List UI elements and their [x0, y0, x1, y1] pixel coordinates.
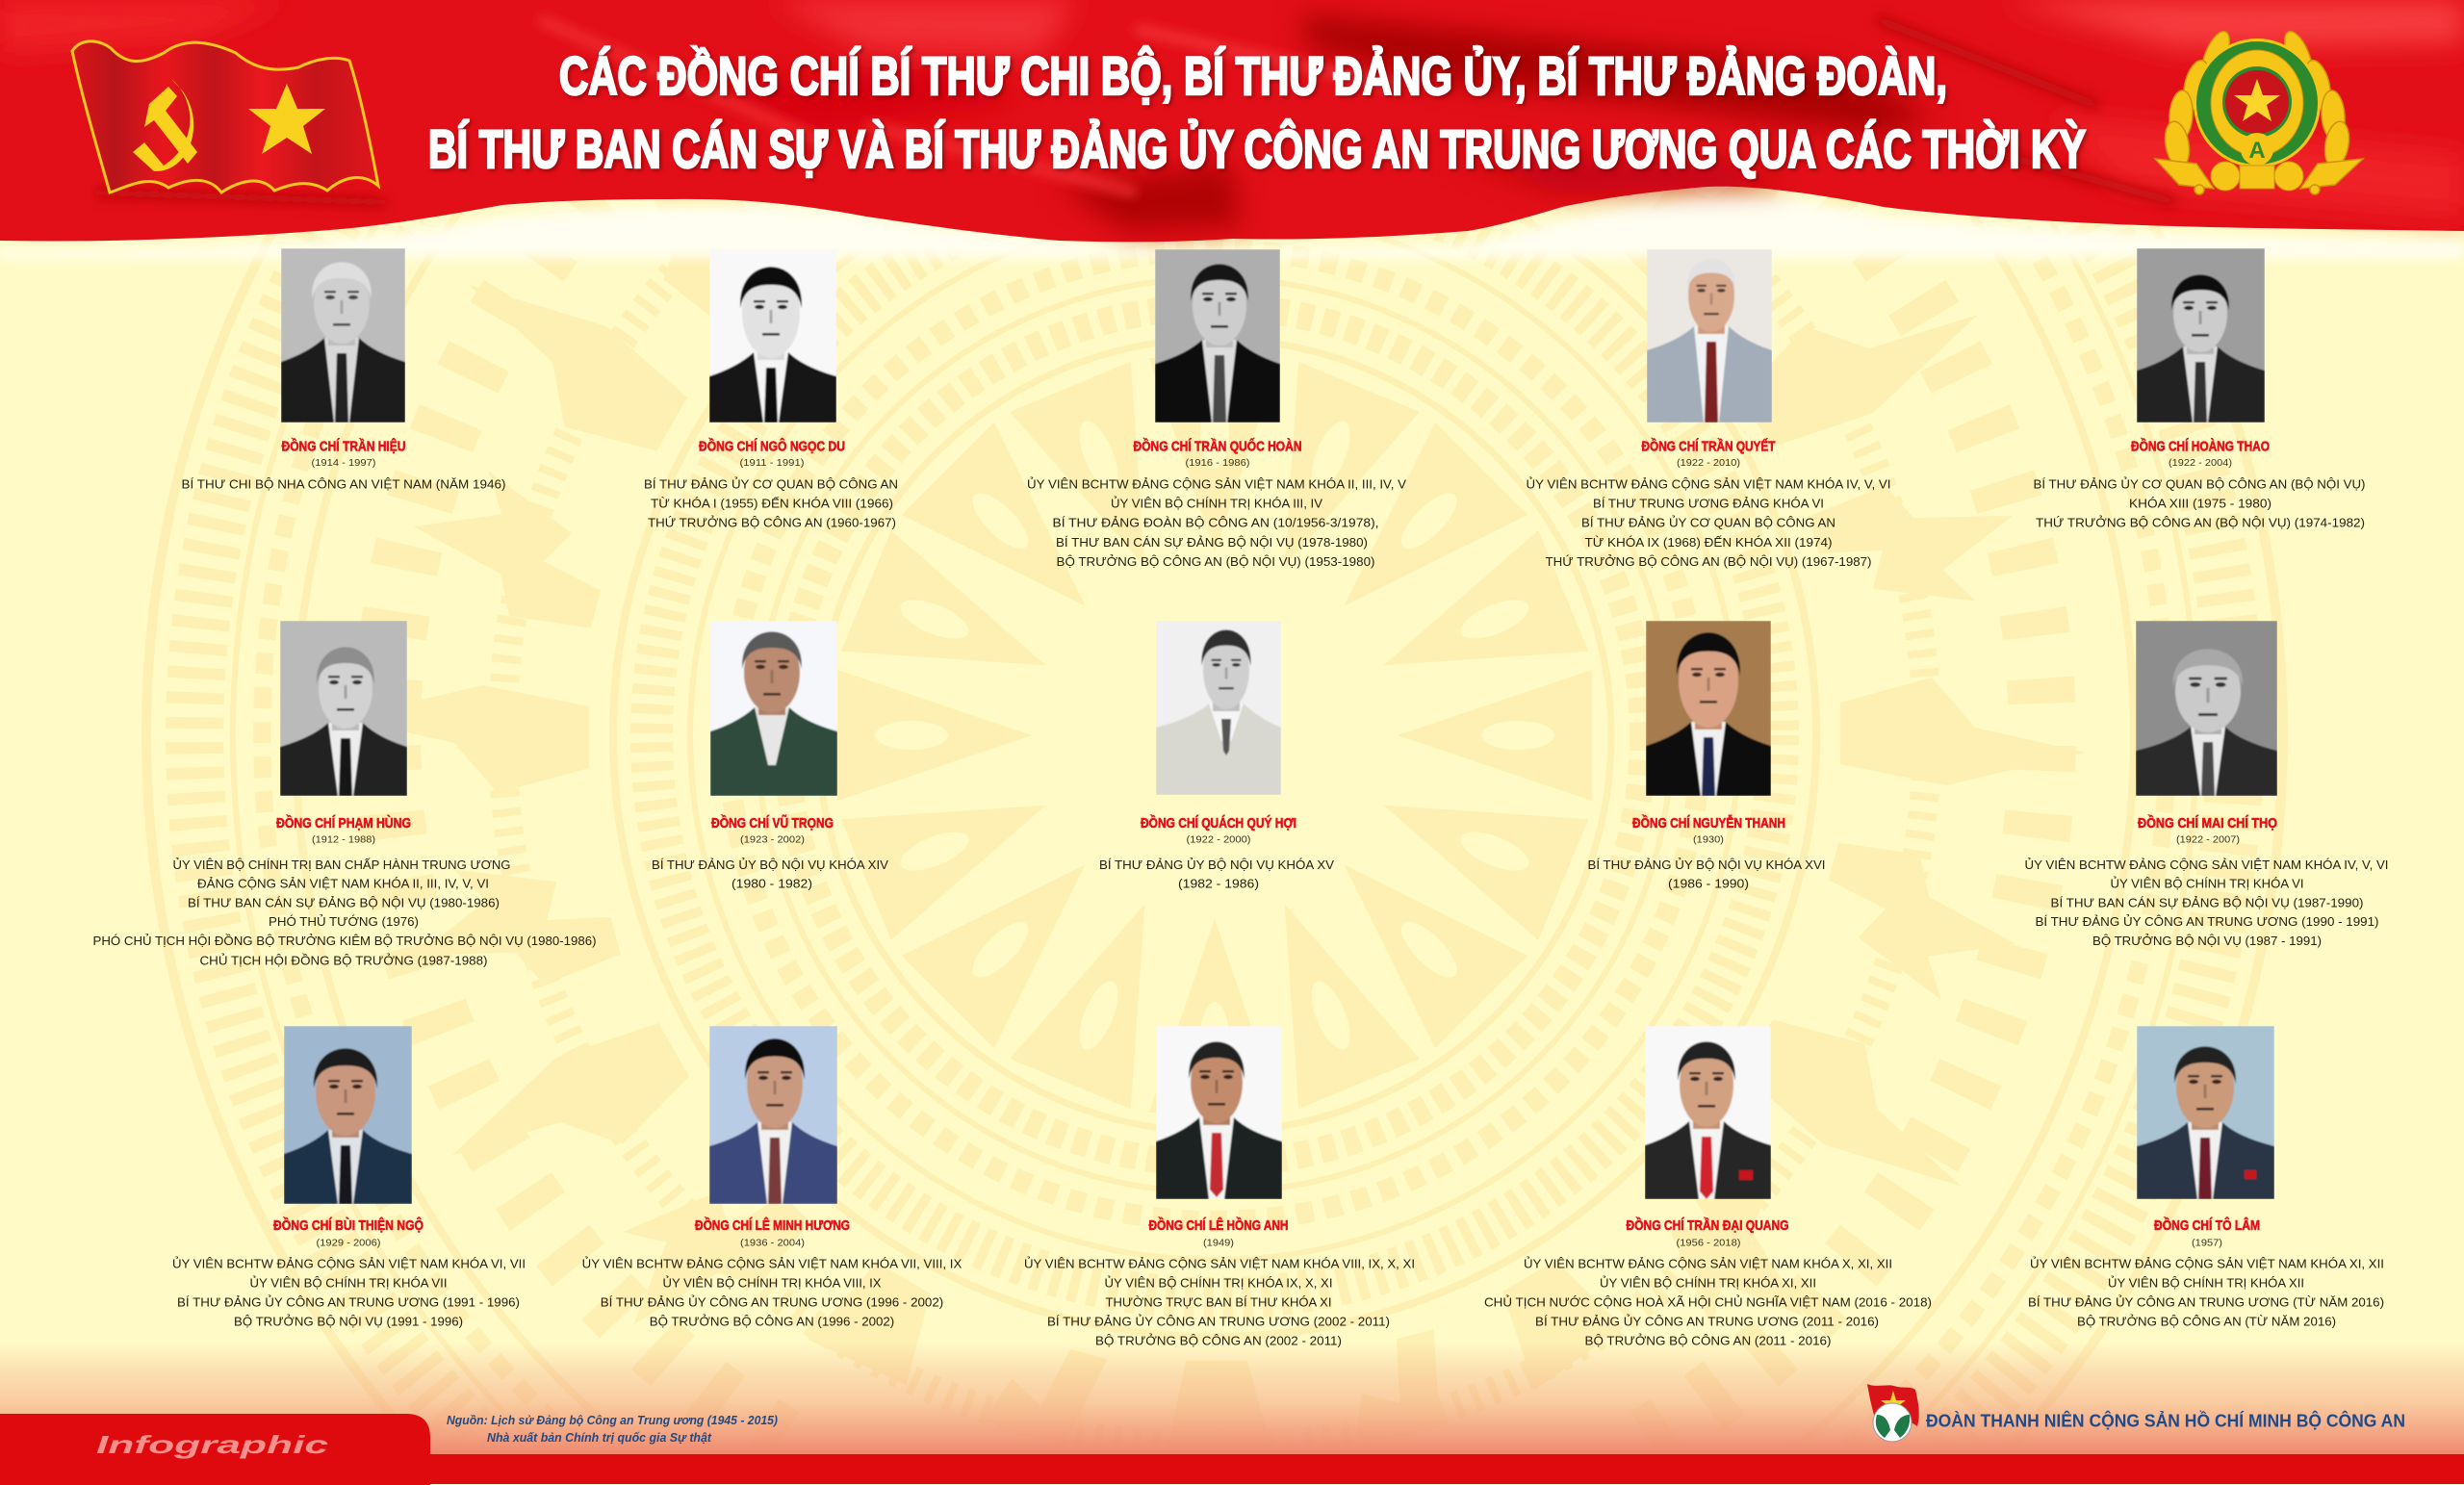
role: ỦY VIÊN BCHTW ĐẢNG CỘNG SẢN VIỆT NAM KHÓA VI, VII — [172, 1256, 526, 1270]
years: (1956 - 2018) — [1677, 1237, 1740, 1248]
icon: hammer and sickle — [133, 79, 197, 171]
role — [582, 1256, 962, 1329]
role: THỨ TRƯỞNG BỘ CÔNG AN (BỘ NỘI VỤ) (1967-1987) — [1546, 554, 1871, 569]
role: BÍ THƯ ĐẢNG ỦY BỘ NỘI VỤ KHÓA XV — [1099, 858, 1334, 872]
role: BỘ TRƯỞNG BỘ NỘI VỤ (1987 - 1991) — [2092, 934, 2322, 948]
years: (1930) — [1693, 833, 1724, 845]
icon: party flag — [72, 41, 378, 192]
role: ỦY VIÊN BỘ CHÍNH TRỊ KHÓA III, IV — [1111, 497, 1322, 510]
name: ĐỒNG CHÍ TRẦN HIỆU — [281, 437, 406, 454]
name: ĐỒNG CHÍ TÔ LÂM — [2154, 1216, 2260, 1234]
role — [172, 1256, 526, 1329]
role: BÍ THƯ TRUNG ƯƠNG ĐẢNG KHÓA VI — [1593, 497, 1824, 510]
person: Quách Quý Hợi — [1099, 621, 1334, 891]
years: (1914 - 1997) — [312, 457, 375, 469]
role: BÍ THƯ ĐẢNG ỦY CƠ QUAN BỘ CÔNG AN — [644, 477, 898, 491]
role: BÍ THƯ BAN CÁN SỰ ĐẢNG BỘ NỘI VỤ (1978-1980) — [1056, 535, 1368, 550]
role: BÍ THƯ ĐẢNG ỦY CÔNG AN TRUNG ƯƠNG (1991 - 1996) — [177, 1295, 520, 1309]
role: TỪ KHÓA IX (1968) ĐẾN KHÓA XII (1974) — [1584, 535, 1833, 550]
footer gradient — [0, 1343, 2464, 1456]
role: (1986 - 1990) — [1668, 877, 1749, 891]
name: ĐỒNG CHÍ QUÁCH QUÝ HỢI — [1141, 814, 1296, 832]
role: BÍ THƯ ĐẢNG ỦY BỘ NỘI VỤ KHÓA XVI — [1588, 858, 1825, 872]
role — [644, 477, 898, 530]
role: BỘ TRƯỞNG BỘ NỘI VỤ (1991 - 1996) — [234, 1315, 463, 1329]
role: BỘ TRƯỞNG BỘ CÔNG AN (TỪ NĂM 2016) — [2077, 1315, 2336, 1329]
role: ỦY VIÊN BỘ CHÍNH TRỊ KHÓA IX, X, XI — [1105, 1275, 1332, 1290]
emblem letter: A — [2248, 138, 2266, 164]
portrait: Tô Lâm — [2137, 1026, 2274, 1199]
role: BÍ THƯ ĐẢNG ỦY CÔNG AN TRUNG ƯƠNG (1996 - 2002) — [601, 1295, 943, 1309]
person: Bùi Thiện Ngộ — [172, 1026, 526, 1329]
role: BÍ THƯ BAN CÁN SỰ ĐẢNG BỘ NỘI VỤ (1987-1990) — [2050, 895, 2364, 909]
years: (1923 - 2002) — [740, 833, 805, 845]
name: ĐỒNG CHÍ HOÀNG THAO — [2131, 437, 2270, 454]
years: (1949) — [1203, 1237, 1234, 1248]
role: ỦY VIÊN BỘ CHÍNH TRỊ BAN CHẤP HÀNH TRUNG ƯƠNG — [173, 858, 510, 872]
role: BÍ THƯ ĐẢNG ỦY CƠ QUAN BỘ CÔNG AN (BỘ NỘI VỤ) — [2033, 477, 2366, 491]
role: ỦY VIÊN BCHTW ĐẢNG CỘNG SẢN VIỆT NAM KHÓA X, XI, XII — [1524, 1256, 1892, 1270]
icon: flag star — [248, 84, 325, 154]
years: (1922 - 2010) — [1677, 457, 1740, 469]
name: ĐỒNG CHÍ NGÔ NGỌC DU — [699, 437, 845, 454]
role: KHÓA XIII (1975 - 1980) — [2129, 497, 2272, 510]
role: ỦY VIÊN BỘ CHÍNH TRỊ KHÓA XI, XII — [1600, 1275, 1816, 1290]
role: BÍ THƯ CHI BỘ NHA CÔNG AN VIỆT NAM (NĂM 1946) — [181, 477, 506, 491]
portrait: Lê Minh Hương — [709, 1026, 837, 1204]
years: (1929 - 2006) — [316, 1237, 381, 1248]
footer organisation name: ĐOÀN THANH NIÊN CỘNG SẢN HỒ CHÍ MINH BỘ CÔNG AN — [1926, 1411, 2405, 1430]
years: (1916 - 1986) — [1186, 457, 1249, 469]
portrait: Ngô Ngọc Du — [709, 249, 836, 422]
person: Lê Hồng Anh — [1024, 1026, 1415, 1347]
portrait: Nguyễn Thanh — [1646, 621, 1771, 796]
role — [1527, 477, 1890, 569]
role: BÍ THƯ ĐẢNG ỦY CÔNG AN TRUNG ƯƠNG (1990 - 1991) — [2035, 914, 2379, 929]
role: ỦY VIÊN BCHTW ĐẢNG CỘNG SẢN VIỆT NAM KHÓA VIII, IX, X, XI — [1024, 1256, 1415, 1270]
portrait: Bùi Thiện Ngộ — [284, 1026, 412, 1204]
role — [652, 858, 888, 891]
role: BỘ TRƯỞNG BỘ CÔNG AN (1996 - 2002) — [650, 1315, 894, 1329]
portrait: Hoàng Thao — [2137, 248, 2265, 422]
portrait: Trần Hiệu — [281, 248, 405, 422]
role — [2025, 858, 2389, 948]
role: ỦY VIÊN BỘ CHÍNH TRỊ KHÓA VII — [250, 1275, 447, 1290]
role: ỦY VIÊN BỘ CHÍNH TRỊ KHÓA VI — [2110, 877, 2304, 891]
years: (1922 - 2004) — [2169, 457, 2232, 469]
years: (1922 - 2000) — [1186, 833, 1251, 845]
name: ĐỒNG CHÍ TRẦN QUYẾT — [1642, 437, 1775, 454]
role: BÍ THƯ ĐẢNG ỦY BỘ NỘI VỤ KHÓA XIV — [652, 858, 888, 872]
role: CHỦ TỊCH NƯỚC CỘNG HOÀ XÃ HỘI CHỦ NGHĨA VIỆT NAM (2016 - 2018) — [1484, 1295, 1932, 1309]
source note — [447, 1413, 778, 1445]
role: ỦY VIÊN BCHTW ĐẢNG CỘNG SẢN VIỆT NAM KHÓA IV, V, VI — [1527, 477, 1890, 491]
person: Trần Đại Quang — [1484, 1026, 1932, 1347]
role: ỦY VIÊN BCHTW ĐẢNG CỘNG SẢN VIỆT NAM KHÓA XI, XII — [2030, 1256, 2384, 1270]
role: BỘ TRƯỞNG BỘ CÔNG AN (2002 - 2011) — [1095, 1334, 1342, 1347]
name: ĐỒNG CHÍ TRẦN QUỐC HOÀN — [1134, 437, 1301, 454]
role: ỦY VIÊN BCHTW ĐẢNG CỘNG SẢN VIỆT NAM KHÓA II, III, IV, V — [1027, 477, 1406, 491]
role: BÍ THƯ ĐẢNG ỦY CƠ QUAN BỘ CÔNG AN — [1581, 516, 1835, 530]
role: ĐẢNG CỘNG SẢN VIỆT NAM KHÓA II, III, IV, V, VI — [197, 877, 489, 891]
role — [1027, 477, 1406, 569]
years: (1912 - 1988) — [312, 833, 375, 845]
name: ĐỒNG CHÍ TRẦN ĐẠI QUANG — [1627, 1216, 1788, 1234]
name: ĐỒNG CHÍ BÙI THIỆN NGỘ — [273, 1216, 424, 1234]
role: BÍ THƯ ĐẢNG ỦY CÔNG AN TRUNG ƯƠNG (2002 - 2011) — [1047, 1315, 1390, 1329]
icon: public security emblem — [2155, 28, 2363, 194]
person: Lê Minh Hương — [582, 1026, 962, 1329]
name: ĐỒNG CHÍ VŨ TRỌNG — [711, 814, 834, 832]
role — [2033, 477, 2366, 530]
role: (1980 - 1982) — [732, 877, 812, 891]
header banner — [0, 0, 2464, 258]
years: (1922 - 2007) — [2176, 833, 2240, 845]
portrait: Phạm Hùng — [280, 621, 407, 796]
person: Mai Chí Thọ — [2025, 621, 2389, 948]
portrait: Lê Hồng Anh — [1156, 1026, 1282, 1199]
role — [2028, 1256, 2384, 1329]
role: TỪ KHÓA I (1955) ĐẾN KHÓA VIII (1966) — [651, 497, 893, 510]
footer red bar — [0, 1454, 2464, 1484]
years: (1957) — [2192, 1237, 2222, 1248]
portrait: Mai Chí Thọ — [2136, 621, 2277, 796]
portrait: Trần Quốc Hoàn — [1155, 249, 1280, 422]
role: BỘ TRƯỞNG BỘ CÔNG AN (2011 - 2016) — [1584, 1334, 1831, 1347]
role: (1982 - 1986) — [1178, 877, 1259, 891]
role — [1099, 858, 1334, 891]
years: (1936 - 2004) — [740, 1237, 805, 1248]
role: PHÓ CHỦ TỊCH HỘI ĐỒNG BỘ TRƯỞNG KIÊM BỘ TRƯỞNG BỘ NỘI VỤ (1980-1986) — [92, 934, 597, 948]
person: Nguyễn Thanh — [1588, 621, 1825, 891]
role: THỨ TRƯỞNG BỘ CÔNG AN (1960-1967) — [648, 516, 896, 530]
role: BÍ THƯ ĐẢNG ỦY CÔNG AN TRUNG ƯƠNG (2011 - 2016) — [1535, 1315, 1879, 1329]
name: ĐỒNG CHÍ NGUYỄN THANH — [1632, 814, 1785, 832]
role: BÍ THƯ ĐẢNG ĐOÀN BỘ CÔNG AN (10/1956-3/1978), — [1053, 516, 1378, 530]
role: PHÓ THỦ TƯỚNG (1976) — [269, 914, 419, 929]
portrait: Vũ Trọng — [710, 621, 837, 796]
person: Hoàng Thao — [2033, 248, 2366, 530]
icon: youth union logo — [1867, 1384, 1919, 1442]
role: ỦY VIÊN BCHTW ĐẢNG CỘNG SẢN VIỆT NAM KHÓA VII, VIII, IX — [582, 1256, 962, 1270]
role: CHỦ TỊCH HỘI ĐỒNG BỘ TRƯỞNG (1987-1988) — [200, 953, 487, 968]
person: Trần Hiệu — [181, 248, 506, 491]
person: Trần Quyết — [1527, 249, 1890, 569]
footer tab: Infographic: Infographic — [96, 1430, 329, 1459]
source note: Nguồn: Lịch sử Đảng bộ Công an Trung ương (1945 - 2015) — [447, 1413, 778, 1427]
role: BỘ TRƯỞNG BỘ CÔNG AN (BỘ NỘI VỤ) (1953-1980) — [1057, 554, 1374, 569]
name: ĐỒNG CHÍ LÊ MINH HƯƠNG — [695, 1216, 850, 1234]
source note: Nhà xuất bản Chính trị quốc gia Sự thật — [487, 1430, 712, 1445]
portrait: Trần Quyết — [1647, 249, 1772, 422]
role — [1484, 1256, 1932, 1347]
role: THỨ TRƯỞNG BỘ CÔNG AN (BỘ NỘI VỤ) (1974-1982) — [2036, 516, 2365, 530]
role: ỦY VIÊN BCHTW ĐẢNG CỘNG SẢN VIỆT NAM KHÓA IV, V, VI — [2025, 858, 2389, 872]
role: ỦY VIÊN BỘ CHÍNH TRỊ KHÓA XII — [2108, 1275, 2304, 1290]
role — [1588, 858, 1825, 891]
role: THƯỜNG TRỰC BAN BÍ THƯ KHÓA XI — [1105, 1295, 1332, 1309]
title: CÁC ĐỒNG CHÍ BÍ THƯ CHI BỘ, BÍ THƯ ĐẢNG ỦY, BÍ THƯ ĐẢNG ĐOÀN, — [559, 45, 1947, 106]
name: ĐỒNG CHÍ LÊ HỒNG ANH — [1149, 1216, 1288, 1234]
role — [92, 858, 597, 968]
person: Ngô Ngọc Du — [644, 249, 898, 530]
name: ĐỒNG CHÍ MAI CHÍ THỌ — [2138, 814, 2277, 832]
person: Phạm Hùng — [92, 621, 597, 968]
title — [428, 45, 2086, 179]
person: Trần Quốc Hoàn — [1027, 249, 1406, 569]
name: ĐỒNG CHÍ PHẠM HÙNG — [276, 814, 411, 832]
role: BÍ THƯ BAN CÁN SỰ ĐẢNG BỘ NỘI VỤ (1980-1986) — [188, 895, 500, 909]
years: (1911 - 1991) — [739, 457, 805, 469]
role — [1024, 1256, 1415, 1347]
footer tab: Infographic — [0, 1414, 430, 1485]
portrait: Trần Đại Quang — [1645, 1026, 1771, 1199]
role: BÍ THƯ ĐẢNG ỦY CÔNG AN TRUNG ƯƠNG (TỪ NĂM 2016) — [2028, 1295, 2384, 1309]
person: Tô Lâm — [2028, 1026, 2384, 1329]
person: Vũ Trọng — [652, 621, 888, 891]
portrait: Quách Quý Hợi — [1156, 621, 1281, 795]
role: ỦY VIÊN BỘ CHÍNH TRỊ KHÓA VIII, IX — [662, 1275, 882, 1290]
